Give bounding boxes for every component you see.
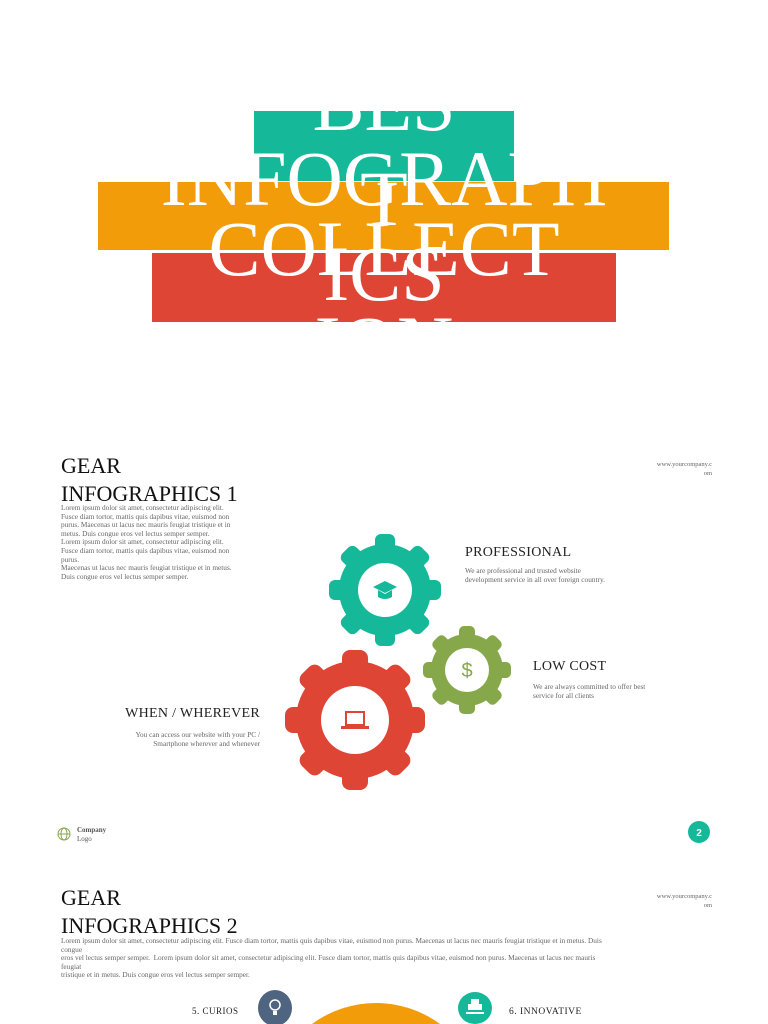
url 2 [656,893,712,909]
label innovative: 6. INNOVATIVE [509,1007,582,1017]
text block intro 2 [61,936,602,979]
orange semicircle [312,1003,440,1024]
text block intro 2: eros vel lectus semper semper. Lorem ipsum dolor sit amet, consectetur adipiscing elit. Fusce diam tortor, mattis quis dapibus vitae, euismod non purus. Maecenas ut lacus nec mauris [61,953,595,962]
gear teal [329,534,441,646]
text block intro 2: Lorem ipsum dolor sit amet, consectetur adipiscing elit. Fusce diam tortor, mattis quis dapibus vitae, euismod non purus. Maecenas ut lacus nec mauris feugiat tristique et in metus. Duis [61,936,602,945]
text block intro 2: tristique et in metus. Duis congue eros vel lectus semper semper. [61,970,250,979]
heading: gear infographics 1 [61,453,238,506]
title text infographics: ICS [323,230,445,317]
title text collection [209,205,559,380]
text block intro 1: Maecenas ut lacus nec mauris feugiat tristique et in metus. [61,563,232,572]
label low cost: LOW COST [533,659,606,674]
text block intro 1 [61,503,232,581]
url 1: om [704,470,712,477]
label when wherever: Smartphone wherever and whenever [153,739,260,748]
label professional: PROFESSIONAL [465,545,571,560]
title text best: T [360,155,408,242]
text block intro 2: feugiat [61,962,81,971]
text block intro 1: Lorem ipsum dolor sit amet, consectetur adipiscing elit. Fusce diam tortor, mattis quis dapibus vitae, euismod non purus. [61,537,229,564]
title block [98,60,669,380]
box red [152,253,616,322]
icon: globe logo [58,828,70,840]
heading: gear infographics 1: INFOGRAPHICS 1 [61,481,238,506]
label professional: We are professional and trusted website [465,566,581,575]
title text infographics [161,135,607,317]
label professional: development service in all over foreign country. [465,575,605,584]
title text best: BES [312,60,456,147]
heading: gear infographics 2: GEAR [61,885,121,910]
label low cost: service for all clients [533,691,594,700]
heading: gear infographics 2 [61,885,238,938]
url 2: om [704,902,712,909]
gear red [285,650,425,790]
label when wherever: WHEN / WHEREVER [125,706,260,721]
box orange [98,182,669,250]
text block intro 1: Duis congue eros vel lectus semper semper. [61,572,188,581]
title text best [312,60,456,242]
url 1: www.yourcompany.c [657,461,712,468]
text block intro 2: congue [61,945,82,954]
icon: curious bulb circle [258,990,292,1024]
title text collection: COLLECT [209,205,559,292]
url 2: www.yourcompany.c [657,893,712,900]
label professional [465,545,605,584]
url 1 [656,461,712,477]
title text infographics: INFOGRAPH [161,135,607,222]
company logo text [77,826,106,843]
gear green [423,626,511,714]
company logo text: Company [77,826,106,834]
page number circle: 2 [696,828,702,839]
heading: gear infographics 1: GEAR [61,453,121,478]
heading: gear infographics 2: INFOGRAPHICS 2 [61,913,238,938]
gear green: $ [461,660,473,682]
page number circle [688,821,710,843]
icon: innovative ship circle [458,992,492,1024]
label curios: 5. CURIOS [192,1006,239,1016]
label when wherever [125,706,260,748]
box teal [254,111,514,181]
text block intro 1: Lorem ipsum dolor sit amet, consectetur adipiscing elit. Fusce diam tortor, mattis quis dapibus vitae, euismod non purus. Maecenas ut lacus nec mauris feugiat tristique et in metus. Duis congue eros vel lectus semper semper. [61,503,230,538]
company logo text: Logo [77,835,92,843]
label low cost [533,659,646,700]
label when wherever: You can access our website with your PC / [135,730,260,739]
label low cost: We are always committed to offer best [533,682,645,691]
